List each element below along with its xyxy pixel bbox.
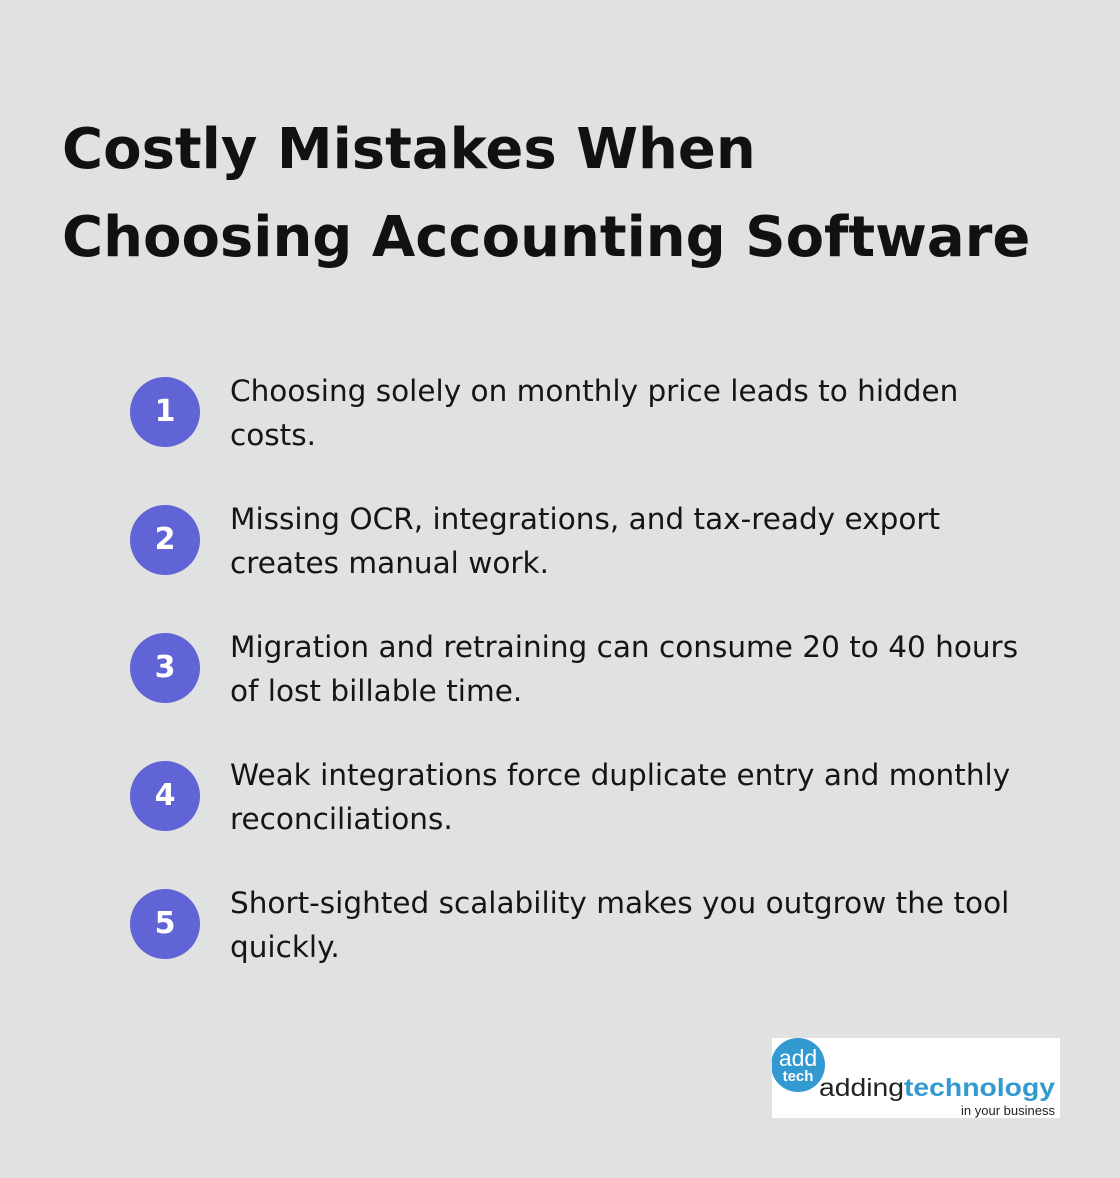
item 5: 5 bbox=[155, 906, 175, 941]
title: Choosing Accounting Software bbox=[62, 205, 1030, 270]
item 3: Migration and retraining can consume 20 to 40 hours of lost billable time. bbox=[230, 630, 1018, 708]
logo: adding technology bbox=[819, 1074, 1055, 1102]
item 4: 4 bbox=[155, 778, 175, 813]
title: Costly Mistakes When bbox=[62, 117, 756, 182]
title bbox=[62, 117, 1030, 270]
logo: tech bbox=[783, 1068, 813, 1085]
item 1: 1 bbox=[155, 394, 175, 429]
item 5: Short-sighted scalability makes you outgrow the tool quickly. bbox=[230, 886, 1009, 964]
item 1: Choosing solely on monthly price leads to hidden costs. bbox=[230, 374, 958, 452]
item 4: Weak integrations force duplicate entry and monthly reconciliations. bbox=[230, 758, 1010, 836]
item 3: 3 bbox=[155, 650, 175, 685]
logo: add bbox=[779, 1045, 817, 1071]
logo: in your business bbox=[961, 1103, 1055, 1118]
logo bbox=[772, 1038, 1060, 1118]
item 2: Missing OCR, integrations, and tax-ready export creates manual work. bbox=[230, 502, 940, 580]
item 2: 2 bbox=[155, 522, 175, 557]
